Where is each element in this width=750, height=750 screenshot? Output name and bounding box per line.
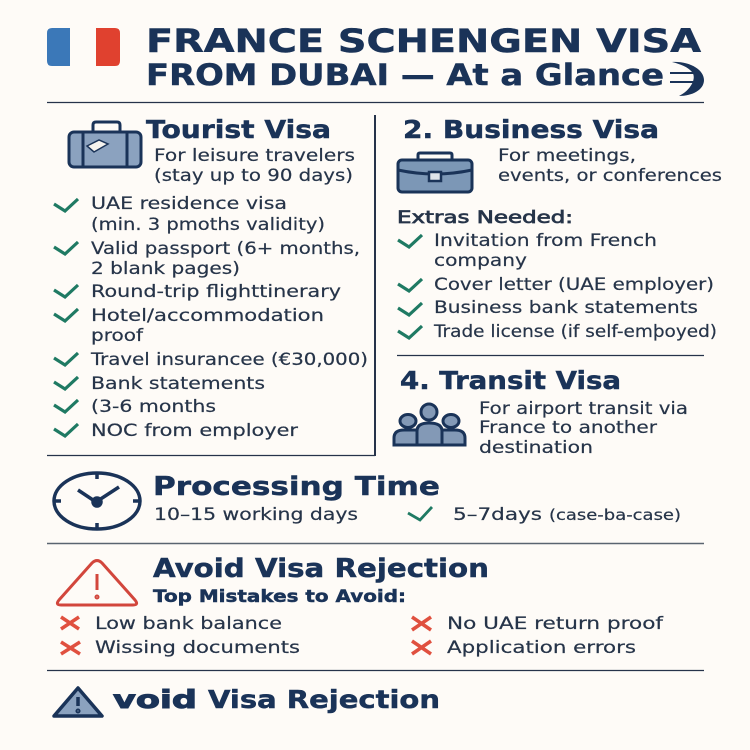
panel: avoid visa rejection	[57, 554, 664, 658]
heading: processing time: Processing Time	[153, 472, 440, 502]
icon: warning triangle	[57, 560, 137, 605]
tourist visa description: For leisure travelers	[154, 146, 355, 166]
tourist visa checklist: proof	[91, 326, 144, 346]
green check marks	[54, 199, 78, 436]
tourist visa checklist: Round-trip flighttinerary	[91, 282, 341, 302]
heading: avoid visa rejection: Avoid Visa Rejection	[153, 554, 489, 584]
tourist visa checklist: NOC from employer	[91, 421, 298, 441]
heading: business visa: 2. Business Visa	[403, 115, 659, 144]
heading: transit visa: 4. Transit Visa	[400, 366, 621, 395]
business visa description: For meetings,	[498, 146, 636, 166]
mistakes list	[95, 614, 664, 658]
transit visa description: France to another	[479, 418, 657, 438]
tourist visa checklist: Valid passport (6+ months,	[91, 239, 360, 259]
icon: group of people	[394, 404, 465, 445]
business visa checklist: Invitation from French	[434, 231, 657, 251]
icon: clock	[54, 473, 140, 529]
icon: suitcase	[69, 122, 141, 167]
icon: briefcase	[398, 153, 472, 192]
tourist visa checklist: (3-6 months	[91, 397, 216, 417]
tourist visa description	[154, 146, 355, 186]
extras needed label: Extras Needed:	[397, 208, 573, 228]
tourist visa description: (stay up to 90 days)	[154, 166, 353, 186]
title: FROM DUBAI — At a Glance	[146, 58, 664, 92]
business visa description	[498, 146, 722, 186]
processing time expedited: 5–7days	[453, 505, 542, 525]
processing time expedited	[453, 505, 681, 525]
tourist visa checklist: Hotel/accommodation	[91, 306, 324, 326]
processing time standard: 10–15 working days	[154, 505, 358, 525]
tourist visa checklist: 2 blank pages)	[91, 259, 240, 279]
business visa checklist: Business bank statements	[434, 298, 698, 318]
business visa checklist: Cover letter (UAE employer)	[434, 275, 714, 295]
mistakes list: No UAE return proof	[447, 614, 664, 634]
business visa checklist: Trade license (if self-emþoyed)	[433, 322, 717, 342]
business visa checklist	[433, 231, 717, 342]
icon: globe	[670, 62, 704, 96]
green check marks	[398, 235, 422, 338]
transit visa description: For airport transit via	[479, 399, 688, 419]
mistakes list: Application errors	[447, 638, 636, 658]
tourist visa checklist: (min. 3 pmoths validity)	[91, 215, 325, 235]
business visa checklist: company	[434, 251, 527, 271]
tourist visa checklist: UAE residence visa	[91, 194, 287, 214]
transit visa description	[479, 399, 688, 458]
title: FRANCE SCHENGEN VISA	[146, 22, 701, 60]
footer: avoid visa rejection	[54, 685, 440, 716]
panel: tourist visa	[54, 115, 368, 441]
tourist visa checklist	[90, 194, 368, 441]
footer heading: Visa Rejection	[208, 685, 440, 714]
tourist visa checklist: Bank statements	[91, 374, 265, 394]
footer heading	[113, 685, 440, 714]
transit visa description: destination	[479, 438, 593, 458]
panel: transit visa	[394, 366, 688, 458]
red cross marks	[61, 617, 431, 654]
tourist visa checklist: Travel insurancee (€30,000)	[90, 350, 368, 370]
title	[146, 22, 701, 92]
icon: small warning triangle	[54, 688, 102, 716]
processing time expedited: (case-ba-case)	[549, 506, 681, 524]
panel: business visa	[397, 115, 722, 342]
mistakes list: Low bank balance	[95, 614, 282, 634]
business visa description: events, or conferences	[498, 166, 722, 186]
mistakes list: Wissing documents	[95, 638, 300, 658]
check mark	[408, 507, 432, 520]
subheading: top mistakes: Top Mistakes to Avoid:	[153, 587, 406, 607]
icon: French flag	[47, 28, 120, 66]
panel: processing time	[54, 472, 681, 529]
heading: tourist visa: Tourist Visa	[146, 115, 331, 144]
footer heading: void	[113, 685, 197, 714]
